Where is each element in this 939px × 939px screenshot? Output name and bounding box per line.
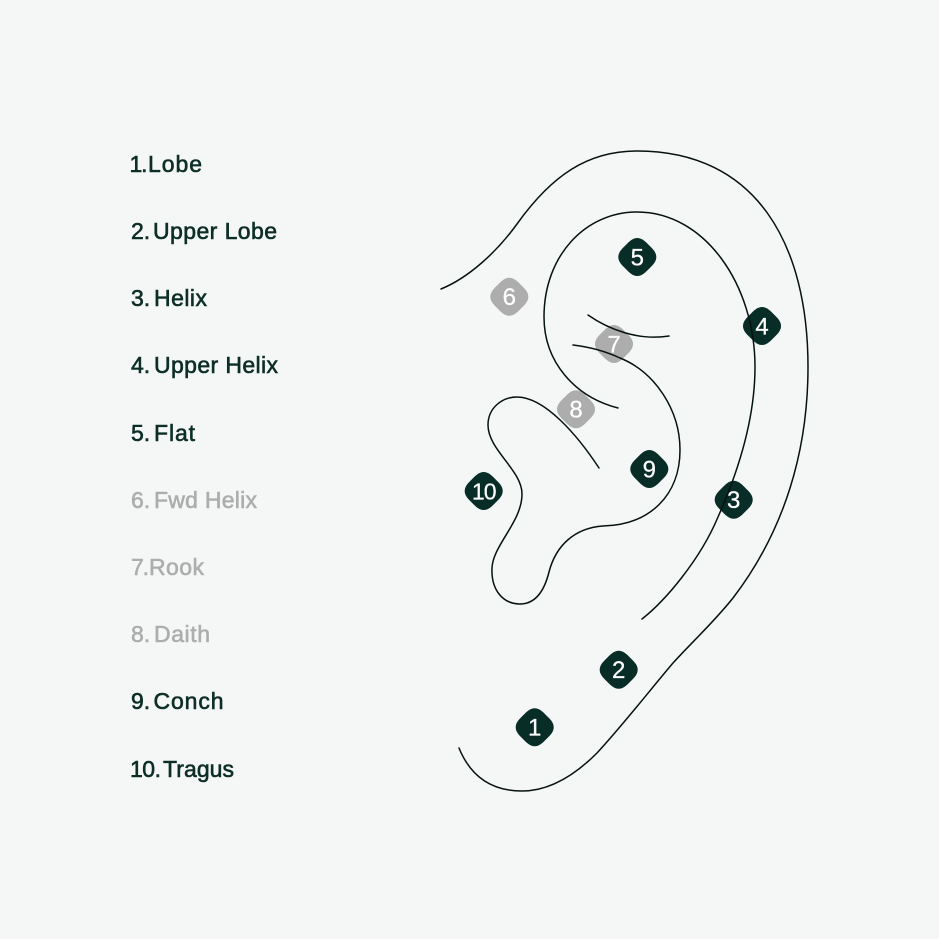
marker 6: 6 [503, 284, 516, 311]
marker 8 [557, 390, 595, 428]
marker 2 [600, 651, 638, 689]
marker 7: 7 [607, 331, 621, 358]
list item 1: 1. [130, 151, 148, 177]
list item 6: Fwd Helix [154, 487, 258, 513]
marker 8: 8 [569, 397, 583, 424]
list item 3: 3. [131, 285, 150, 311]
marker 5 [618, 238, 656, 276]
marker 7 [595, 325, 633, 363]
marker 5: 5 [631, 244, 644, 271]
list item 5 [131, 420, 196, 446]
list item 10 [130, 756, 234, 782]
list item 5: Flat [154, 420, 196, 446]
marker 4 [743, 307, 781, 345]
outer ear curve [441, 151, 808, 791]
list item 8: Daith [154, 621, 210, 647]
marker 10 [465, 472, 503, 510]
marker 10: 10 [472, 478, 496, 504]
marker 3: 3 [727, 487, 740, 514]
list item 3: Helix [154, 285, 208, 311]
inner helix curve [544, 212, 755, 619]
marker 6 [490, 278, 528, 316]
list item 4: 4. [131, 352, 150, 378]
list item 6: 6. [131, 487, 150, 513]
list item 9: Conch [154, 688, 224, 714]
list item 4: Upper Helix [154, 352, 278, 378]
concha and tragus curve [488, 345, 680, 604]
list item 7: 7. [131, 554, 149, 580]
marker 4: 4 [755, 313, 769, 340]
marker 2: 2 [612, 657, 625, 684]
ear outline [441, 151, 808, 791]
list item 10: Tragus [163, 756, 234, 782]
list item 9: 9. [131, 688, 150, 714]
list item 8: 8. [131, 621, 150, 647]
list item 5: 5. [131, 420, 150, 446]
list item 7: Rook [149, 554, 204, 580]
short antihelix curve [588, 315, 669, 337]
marker 3 [715, 481, 753, 519]
marker 9 [630, 450, 668, 488]
list item 10: 10. [130, 756, 161, 782]
marker 9: 9 [643, 456, 656, 483]
list item 2: Upper Lobe [153, 218, 277, 244]
list item 3 [131, 285, 208, 311]
marker 1: 1 [528, 715, 541, 742]
list item 1: Lobe [148, 151, 202, 177]
list item 2: 2. [131, 218, 150, 244]
marker 1 [516, 708, 554, 746]
